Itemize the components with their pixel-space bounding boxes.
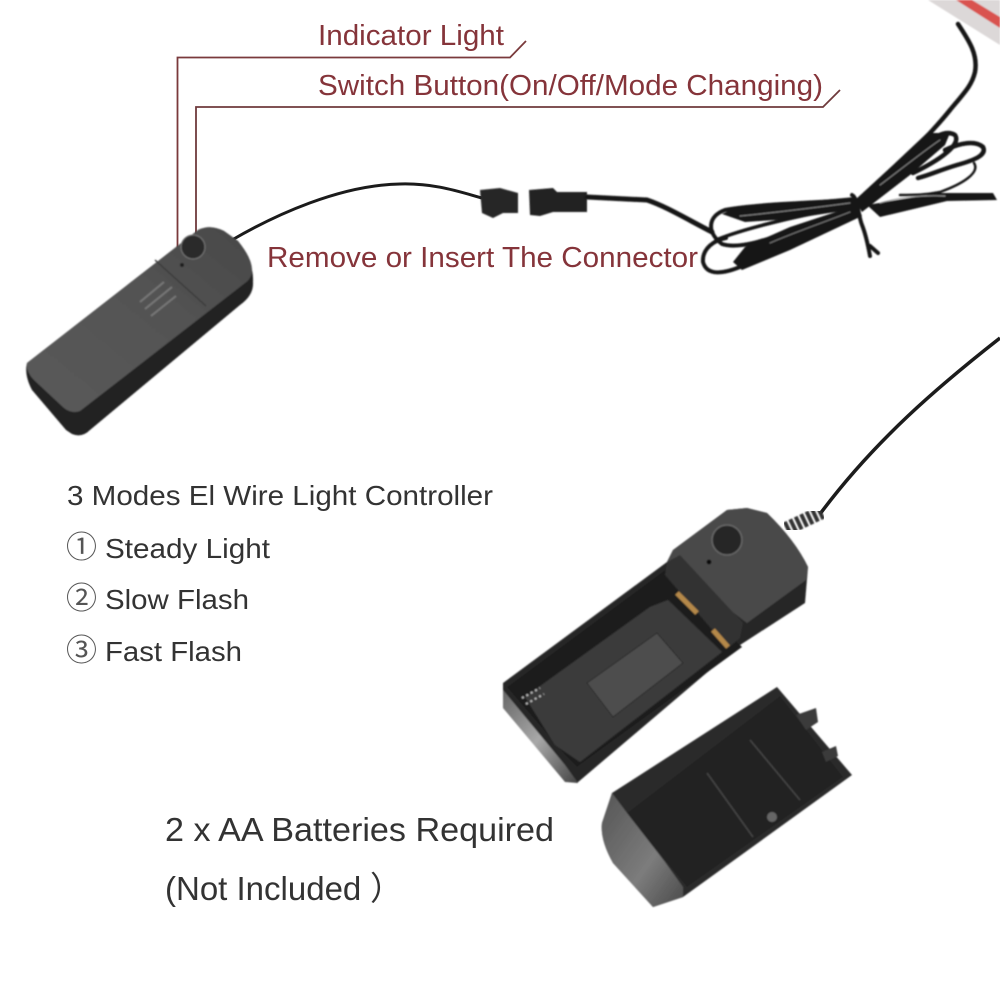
modes text block: ① — [66, 530, 97, 565]
batteries note: ） — [370, 870, 403, 907]
cover front wall — [602, 793, 683, 907]
coiled wire bundle — [587, 24, 997, 272]
modes text block: 3 Modes El Wire Light Controller — [67, 480, 493, 511]
callout: indicator light: Indicator Light — [318, 20, 504, 52]
holder head top — [667, 508, 808, 623]
indicator hole — [706, 560, 712, 564]
cable to open controller — [820, 338, 1000, 514]
callout: indicator light — [178, 20, 526, 263]
callout: switch button: Switch Button(On/Off/Mode Changing) — [318, 70, 823, 102]
modes text block: ② — [66, 581, 97, 616]
strain relief — [786, 512, 822, 529]
gold contacts — [677, 593, 728, 647]
batteries note — [165, 811, 554, 907]
holder front wall highlight — [503, 690, 578, 783]
modes text block: Fast Flash — [105, 636, 242, 667]
cover dividers — [707, 740, 800, 837]
open battery holder — [503, 508, 808, 783]
batteries note: 2 x AA Batteries Required — [165, 811, 554, 848]
cover clips — [796, 708, 838, 762]
modes text block: Steady Light — [105, 533, 270, 564]
cover floor — [627, 696, 843, 887]
holder interior back wall — [507, 570, 742, 767]
callout: connector: Remove or Insert The Connector — [267, 242, 698, 274]
contact clip block — [665, 555, 743, 648]
cable from controller to connector — [232, 184, 482, 240]
callout: switch button — [196, 70, 840, 243]
connector plugs — [480, 188, 587, 218]
embossed label — [587, 633, 683, 717]
modes text block: ③ — [66, 633, 97, 668]
modes text block — [66, 480, 493, 668]
battery cover — [602, 687, 852, 907]
spring contacts — [522, 688, 544, 704]
corner red stripe decoration — [928, 0, 1000, 45]
power button — [712, 525, 742, 555]
holder interior floor — [525, 600, 722, 762]
controller closed — [26, 227, 253, 435]
batteries note: (Not Included — [165, 870, 361, 907]
cover round mark — [767, 812, 777, 822]
modes text block: Slow Flash — [105, 584, 249, 615]
